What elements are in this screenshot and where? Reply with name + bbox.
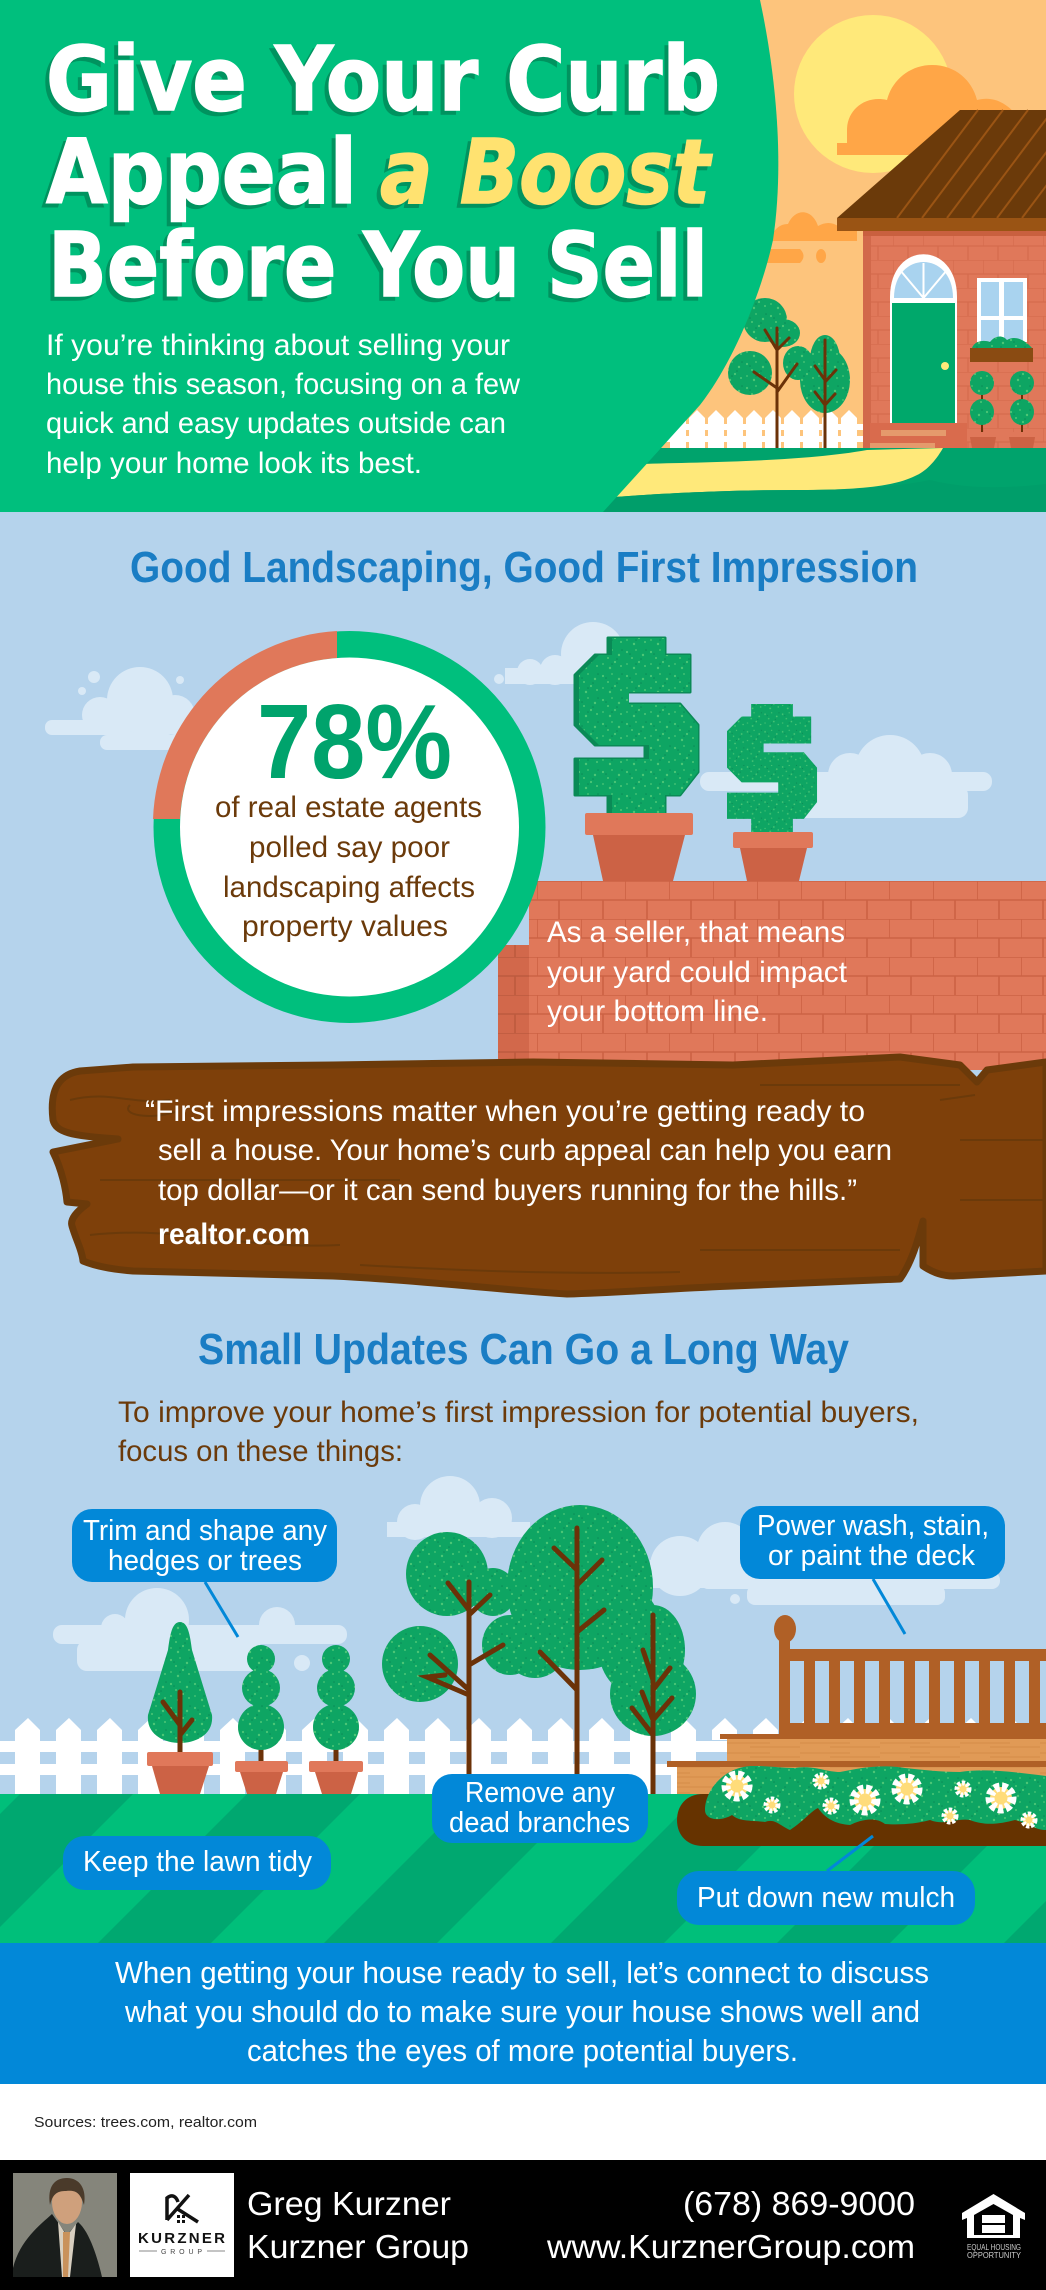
icon: large dollar topiary [575, 638, 698, 881]
callout: dead branches: Remove any [465, 1777, 615, 1809]
wall text: As a seller, that means [547, 916, 845, 949]
icon: small dollar topiary [727, 704, 817, 881]
contact info: (678) 869-9000 [683, 2185, 915, 2222]
intro text: focus on these things: [118, 1435, 403, 1468]
logo [130, 2173, 234, 2277]
roof [837, 110, 1046, 231]
heading: Good Landscaping, Good First Impression [130, 543, 918, 592]
agent name: Greg Kurzner [247, 2185, 451, 2222]
intro text: To improve your home’s first impression for potential buyers, [118, 1396, 919, 1429]
ground [600, 448, 1046, 512]
icon: equal housing [962, 2194, 1025, 2260]
agent name [247, 2185, 469, 2265]
tree foliage [507, 1505, 653, 1669]
wall text: your bottom line. [547, 995, 768, 1028]
house wall [863, 230, 1046, 448]
stat text: landscaping affects [223, 871, 475, 904]
contact info [546, 2185, 915, 2265]
icon: orange cloud [837, 65, 1020, 155]
agent name: Kurzner Group [247, 2228, 469, 2265]
small topiaries [968, 371, 1037, 448]
window [977, 278, 1027, 342]
callout: trim hedges: Trim and shape any [83, 1515, 327, 1547]
logo mark [167, 2195, 198, 2222]
flower box [970, 336, 1033, 362]
icon: house [837, 110, 1046, 448]
intro text: If you’re thinking about selling your [46, 329, 510, 362]
stat text [215, 791, 482, 943]
sources text: Sources: trees.com, realtor.com [34, 2114, 257, 2131]
quote: top dollar—or it can send buyers running for the hills.” [158, 1174, 857, 1207]
heading: Small Updates Can Go a Long Way [198, 1325, 849, 1374]
quote: sell a house. Your home’s curb appeal can help you earn [158, 1134, 892, 1167]
cta text: When getting your house ready to sell, let’s connect to discuss [115, 1955, 929, 1990]
intro text [118, 1396, 919, 1468]
large daisies [726, 1775, 1012, 1811]
quote [145, 1095, 892, 1207]
big number: 78% [257, 683, 452, 801]
wooden sign [52, 1057, 1046, 1294]
title [46, 27, 720, 317]
cta text [115, 1955, 929, 2068]
clouds [45, 622, 992, 818]
intro text: house this season, focusing on a few [46, 368, 520, 401]
topiary ball left [235, 1645, 288, 1794]
white centre [180, 658, 519, 996]
panel: good landscaping [45, 543, 1046, 1294]
sources panel [0, 2084, 1046, 2160]
stat text: of real estate agents [215, 791, 482, 824]
icon: sun [794, 15, 952, 173]
title: Give Your Curb [46, 27, 720, 131]
quote: “First impressions matter when you’re getting ready to [145, 1095, 865, 1128]
flower bushes [705, 1766, 1046, 1830]
intro text: quick and easy updates outside can [46, 407, 506, 440]
small pot [733, 832, 813, 881]
icon: cloud streak [745, 249, 826, 263]
sky background [0, 512, 1046, 1944]
icon: equal housing: OPPORTUNITY [967, 2251, 1022, 2260]
quote source: realtor.com [158, 1218, 310, 1251]
callout: power wash: or paint the deck [768, 1540, 975, 1572]
cta text: catches the eyes of more potential buyers. [247, 2033, 798, 2068]
donut chart: 78% [153, 631, 546, 1023]
intro text [46, 329, 520, 480]
lower ground [600, 480, 1046, 512]
panel: small updates [0, 1325, 1046, 1943]
callout: power wash [740, 1506, 1005, 1634]
panel: call to action [0, 1943, 1046, 2084]
callout: lawn [63, 1836, 331, 1890]
panel: header [0, 0, 1046, 512]
stat text: property values [242, 910, 448, 943]
mulch bed [677, 1794, 1046, 1846]
small daisies [766, 1775, 1035, 1826]
callout: lawn: Keep the lawn tidy [83, 1846, 312, 1878]
callout: power wash: Power wash, stain, [757, 1510, 989, 1542]
callout: trim hedges: hedges or trees [108, 1545, 302, 1577]
cta text: what you should do to make sure your house shows well and [124, 1994, 920, 2029]
title: a Boost [380, 120, 713, 224]
callout: dead branches [432, 1774, 648, 1843]
callout: mulch [677, 1836, 975, 1925]
wall text [547, 916, 848, 1028]
callout: dead branches: dead branches [449, 1807, 630, 1839]
logo: GROUP [161, 2249, 202, 2256]
fence [0, 1718, 1024, 1794]
topiary tall [147, 1622, 213, 1794]
trees [382, 1505, 696, 1794]
header sky [600, 0, 1046, 512]
steps [870, 423, 967, 448]
logo: KURZNER [138, 2230, 225, 2247]
door [890, 254, 957, 424]
deck [667, 1615, 1046, 1794]
panel: footer [0, 2160, 1046, 2290]
topiary ball right [309, 1645, 363, 1794]
clouds [53, 1476, 1000, 1671]
agent photo [13, 2173, 117, 2277]
wall text: your yard could impact [547, 956, 848, 989]
title: Before You Sell [48, 213, 708, 317]
icon: small orange cloud [765, 212, 857, 241]
brick wall [498, 881, 1046, 1070]
tree branches [427, 1528, 672, 1794]
orange segment [153, 631, 337, 819]
intro text: help your home look its best. [46, 447, 422, 480]
fence [665, 410, 863, 448]
callout: trim hedges [72, 1509, 337, 1637]
large pot [585, 813, 693, 881]
title: Appeal [46, 120, 357, 224]
icon: equal housing: EQUAL HOUSING [967, 2243, 1021, 2252]
green panel curve [0, 0, 778, 512]
contact info: www.KurznerGroup.com [546, 2228, 915, 2265]
stat text: polled say poor [249, 831, 450, 864]
trees [728, 298, 850, 448]
callout: mulch: Put down new mulch [697, 1882, 955, 1914]
path [600, 448, 943, 498]
lawn [0, 1794, 1046, 1943]
